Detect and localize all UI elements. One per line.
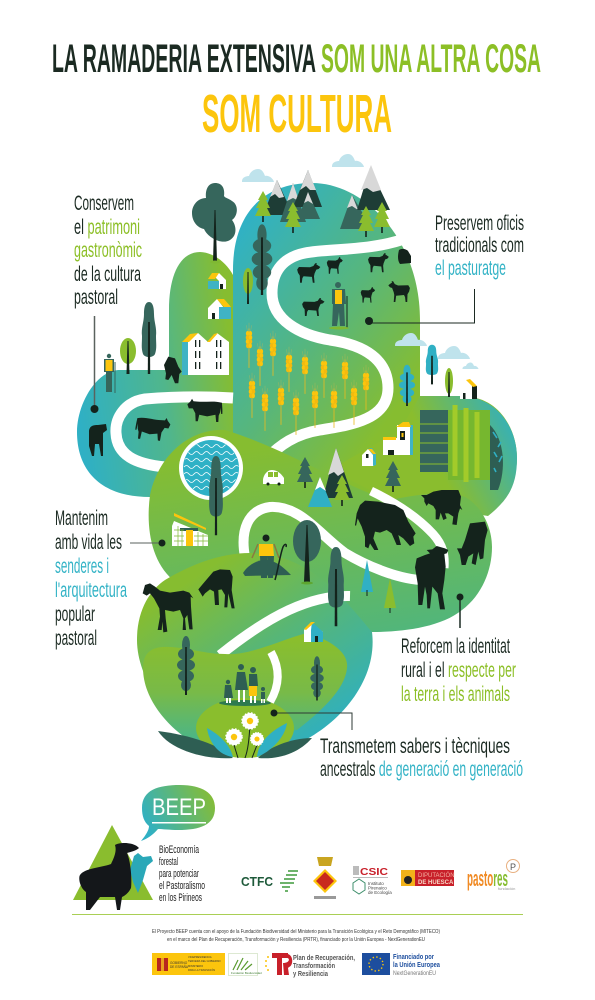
big dark tree: [192, 183, 237, 264]
white road top: [266, 237, 410, 459]
footer rule: [72, 914, 523, 915]
callout: respecte: [401, 634, 516, 706]
family: [219, 664, 271, 706]
footer funding text: [152, 929, 440, 943]
logo: Gobierno de España: VICEPRESIDENCIA: [188, 955, 212, 959]
callout: patrimoni gastronòmic: [74, 191, 142, 309]
BEEP logo: [73, 785, 215, 910]
callout: senderes: pastoral: [55, 626, 97, 650]
field: central valley column: [233, 183, 517, 520]
callout: senderes: senderes i: [55, 554, 109, 578]
illustrated landscape: [77, 154, 517, 758]
callout: respecte: rural i el respecte per: [401, 658, 516, 682]
BEEP wordmark: BEEP: [152, 794, 206, 821]
BEEP tagline: BioEconomía: [159, 844, 200, 856]
top mountains: [263, 165, 390, 229]
title: SOM CULTURA: [202, 84, 392, 144]
shepherd: [329, 282, 349, 330]
logo: Gobierno de España: MINISTERIO: [188, 964, 203, 968]
cows left: [89, 357, 222, 456]
title: [52, 37, 541, 144]
title: LA RAMADERIA EXTENSIVA: [52, 37, 316, 81]
BEEP tagline: el Pastoralismo: [159, 880, 205, 892]
logo: Plan de Recuperación: Transformación: [293, 963, 335, 970]
logo: Plan de Recuperación: y Resiliencia: [293, 971, 328, 978]
teal sheep: [130, 853, 153, 893]
white apartment building: [182, 333, 229, 375]
field: right terrace hill: [330, 396, 517, 516]
black sheep: [79, 843, 139, 910]
callout: pasturatge: tradicionals com: [435, 233, 524, 257]
callout: respecte: Reforcem la identitat: [401, 634, 510, 658]
houses on arch: [208, 273, 231, 319]
logo: Plan de Recuperación: [265, 953, 355, 978]
middle mountains and pines: [297, 448, 401, 507]
callout: patrimoni gastronòmic: pastoral: [74, 285, 118, 309]
logo: CSIC: Instituto: [368, 881, 384, 886]
wheat field: [246, 323, 369, 435]
BEEP tagline: para potenciar: [159, 868, 199, 880]
seated shepherd: [243, 534, 291, 580]
logo: CSIC: [353, 866, 392, 895]
logo: Gobierno de España: PARA LA TRANSICIÓN: [188, 967, 215, 972]
green triangle: [73, 825, 153, 900]
white church and house: [362, 422, 413, 466]
callout: patrimoni gastronòmic: de la cultura: [74, 262, 141, 286]
right lower trees: [328, 547, 396, 626]
callout: patrimoni gastronòmic: gastronòmic: [74, 238, 142, 262]
goats and dog: [297, 249, 411, 316]
logo: CTFC: CTFC: [241, 875, 273, 889]
logo: Pastores: fundación: [498, 886, 515, 891]
white road branch: [371, 491, 444, 568]
logo: Diputación de Huesca: DE HUESCA: [418, 880, 454, 886]
logo: Fundación Biodiversidad: Fundación Biodiversidad: [231, 971, 262, 975]
logo: CSIC: CSIC: [360, 867, 388, 878]
stone house: [172, 513, 208, 546]
field: middle hill: [149, 430, 492, 632]
middle trees: [209, 456, 321, 584]
callout: senderes: l'arquitectura: [55, 578, 127, 602]
white road left: [116, 397, 233, 467]
top pines and cloud: [242, 154, 390, 237]
shepherd left: [104, 354, 115, 393]
right clouds and trees: [395, 333, 478, 406]
big goats: [143, 569, 235, 632]
trees left: [120, 224, 272, 374]
logo: CTFC: [241, 871, 298, 891]
callout: pasturatge: [435, 211, 524, 280]
logo: Gobierno de España: GOBIERNO: [170, 961, 188, 965]
white road to family: [270, 652, 278, 702]
BEEP tagline: en los Pirineos: [159, 892, 202, 904]
lower feather trees: [177, 636, 324, 700]
logo: Gobierno de España: [152, 953, 225, 975]
field: bottom hill: [143, 633, 347, 745]
crop field terraces: [420, 405, 503, 490]
logo: Gobierno de España: TERCERA DEL GOBIERNO: [188, 959, 221, 963]
footer funding text: El Proyecto BEEP cuenta con el apoyo de la Fundación Biodiversidad del Ministerio para la Transición Ecológica y el Reto Demográfico (MITECO): [152, 929, 440, 935]
callout leader: bottom: [270, 710, 352, 730]
white road lower: [220, 596, 350, 655]
logo: Pastores: pastores: [467, 866, 508, 891]
logo: Diputación de Huesca: [401, 870, 455, 886]
field: lower hill: [137, 553, 373, 748]
chimney hut: [460, 379, 477, 399]
callout: pasturatge: Preservem oficis: [435, 211, 524, 235]
logo: coat of arms: [313, 857, 337, 899]
BEEP tagline: [159, 844, 205, 904]
callout leader: right: [365, 289, 474, 325]
white car: [263, 470, 284, 486]
callout: senderes: Mantenim: [55, 506, 108, 530]
callout leader: left: [90, 316, 98, 413]
callout: senderes: [55, 506, 127, 650]
logo: Plan de Recuperación: Plan de Recuperación,: [293, 955, 355, 962]
logo: Diputación de Huesca: DIPUTACIÓN: [418, 872, 455, 879]
callout: patrimoni gastronòmic: Conservem: [74, 191, 134, 215]
logo: EU flag: la Unión Europea: [393, 960, 441, 969]
footer funding text: en el marco del Plan de Recuperación, Transformación y Resiliencia (PRTR), financiado por la Unión Europea - NextGenerationEU: [167, 937, 425, 943]
blue house: [304, 622, 323, 642]
callout: respecte: la terra i els animals: [401, 682, 510, 706]
logo: EU flag: Financiado por: [393, 952, 434, 961]
logo: Fundación Biodiversidad: [228, 954, 262, 976]
callout: generació: [320, 734, 523, 781]
callout: patrimoni gastronòmic: el patrimoni: [74, 215, 140, 239]
logo: EU flag: [362, 952, 441, 977]
logo: EU flag: NextGenerationEU: [393, 970, 436, 977]
field: left arch and pasture: [77, 252, 240, 497]
callout: senderes: popular: [55, 602, 95, 626]
field: foreground mound: [196, 698, 294, 758]
callout leader: respecte: [456, 594, 464, 628]
logo: CSIC: Pirenaico: [368, 886, 387, 890]
water pond: [179, 436, 243, 500]
logo: Pastores: P: [510, 862, 516, 872]
callout: pasturatge: el pasturatge: [435, 256, 506, 280]
BEEP tagline: forestal: [159, 856, 178, 868]
large cows: [355, 490, 488, 609]
callout leader: middle: [130, 540, 166, 546]
white road middle: [244, 507, 420, 580]
daisies: [226, 713, 263, 758]
leaves: [158, 723, 312, 758]
logo: Gobierno de España: DE ESPAÑA: [170, 964, 189, 969]
callout: senderes: amb vida les: [55, 530, 122, 554]
logo: CSIC: de Ecología: [368, 890, 392, 895]
speech bubble: [141, 785, 215, 841]
